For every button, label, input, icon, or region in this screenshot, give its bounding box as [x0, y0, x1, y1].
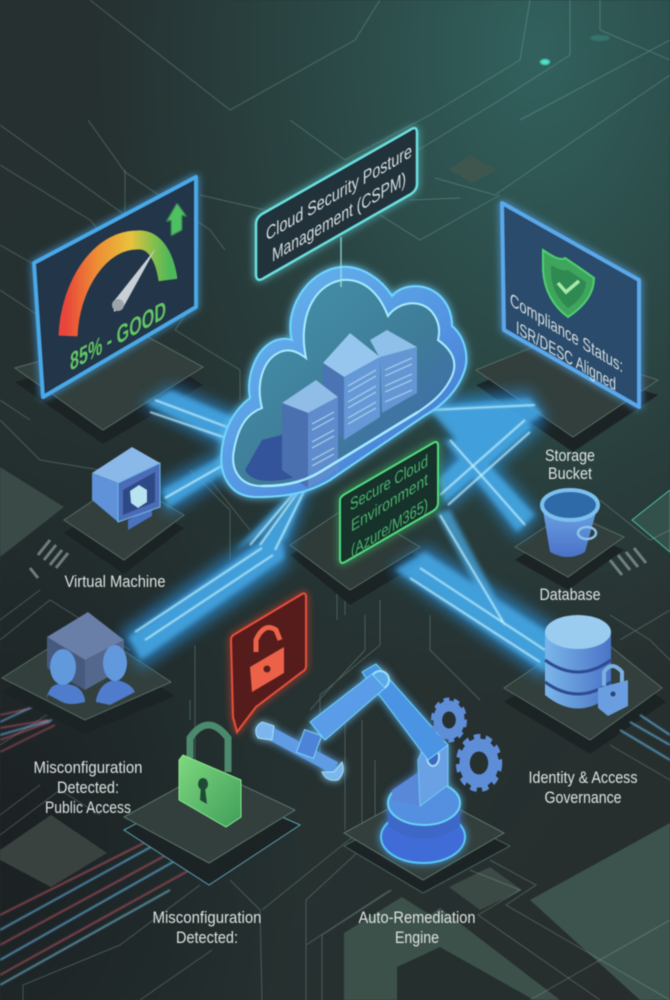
environment text: (Azure/M365): [351, 494, 428, 561]
environment text: Secure Cloud: [350, 450, 428, 515]
platform: gauge: [15, 333, 203, 444]
compliance panel: [502, 203, 639, 407]
compliance text: [510, 289, 623, 396]
label: storage bucket: Storage: [545, 446, 595, 465]
server rack right: [370, 330, 417, 413]
label: misconfiguration detected: Detected:: [176, 928, 238, 947]
gauge needle: [112, 248, 156, 312]
server rack left: [282, 380, 338, 488]
label: virtual machine: Virtual Machine: [64, 572, 166, 591]
icon: robot arm: [256, 664, 465, 863]
label: database: Database: [540, 585, 600, 604]
label: public access misconfiguration: [34, 758, 142, 817]
platform: robot: [344, 790, 510, 893]
secure cloud environment panel: [340, 442, 438, 563]
up arrow: [166, 203, 187, 236]
alert bubble: [231, 593, 306, 732]
gauge arc: [68, 240, 168, 336]
score text: 85% - GOOD: [70, 295, 166, 377]
icon: database with lock: [545, 615, 628, 716]
CSPM label panel: [256, 128, 417, 280]
platform: database: [504, 630, 666, 754]
environment text: Environment: [351, 468, 429, 536]
open padlock: [250, 628, 284, 692]
label: public access misconfiguration: Detected:: [57, 778, 119, 797]
central cloud: [221, 267, 466, 497]
label: public access misconfiguration: Public Access: [45, 798, 131, 817]
platform: green lock: [124, 770, 300, 885]
icon: small gear: [433, 700, 465, 740]
wrench: [256, 722, 343, 780]
label: identity and access governance: [528, 768, 638, 807]
label: misconfiguration detected: [152, 908, 262, 947]
label: identity and access governance: Governance: [544, 788, 622, 807]
label: public access misconfiguration: Misconfiguration: [34, 758, 142, 777]
cloud connector: [340, 237, 342, 287]
icon: identity group: [47, 612, 135, 705]
CSPM text: Cloud Security Posture: [266, 140, 412, 246]
label: identity and access governance: Identity & Access: [528, 768, 638, 787]
icon: storage bucket: [542, 490, 598, 557]
label: misconfiguration detected: Misconfiguration: [152, 908, 262, 927]
server rack centre: [323, 333, 380, 440]
label: auto-remediation engine: Engine: [395, 928, 439, 947]
label: storage bucket: Bucket: [548, 464, 592, 483]
icon: virtual machine: [92, 447, 160, 530]
platform: storage bucket: [515, 512, 624, 590]
label: auto-remediation engine: Auto-Remediation: [358, 908, 476, 927]
label: auto-remediation engine: [358, 908, 476, 947]
streaks lower left: [0, 708, 670, 985]
compliance text: Compliance Status:: [510, 289, 623, 377]
environment text: [350, 450, 429, 561]
compliance text: ISR/DESC Aligned: [516, 317, 616, 396]
chip pins: [30, 540, 646, 578]
icon: green padlock: [179, 725, 241, 827]
platform: virtual machine: [64, 480, 184, 574]
CSPM text: Management (CSPM): [272, 168, 406, 267]
shield icon: [543, 250, 594, 317]
platform: secure cloud environment: [290, 505, 425, 605]
data beams: [120, 385, 570, 680]
platform: compliance: [476, 343, 658, 452]
gauge panel: [34, 177, 196, 397]
platform: identity: [2, 625, 175, 734]
icon: large gear: [458, 737, 500, 789]
label: storage bucket: [545, 446, 595, 483]
